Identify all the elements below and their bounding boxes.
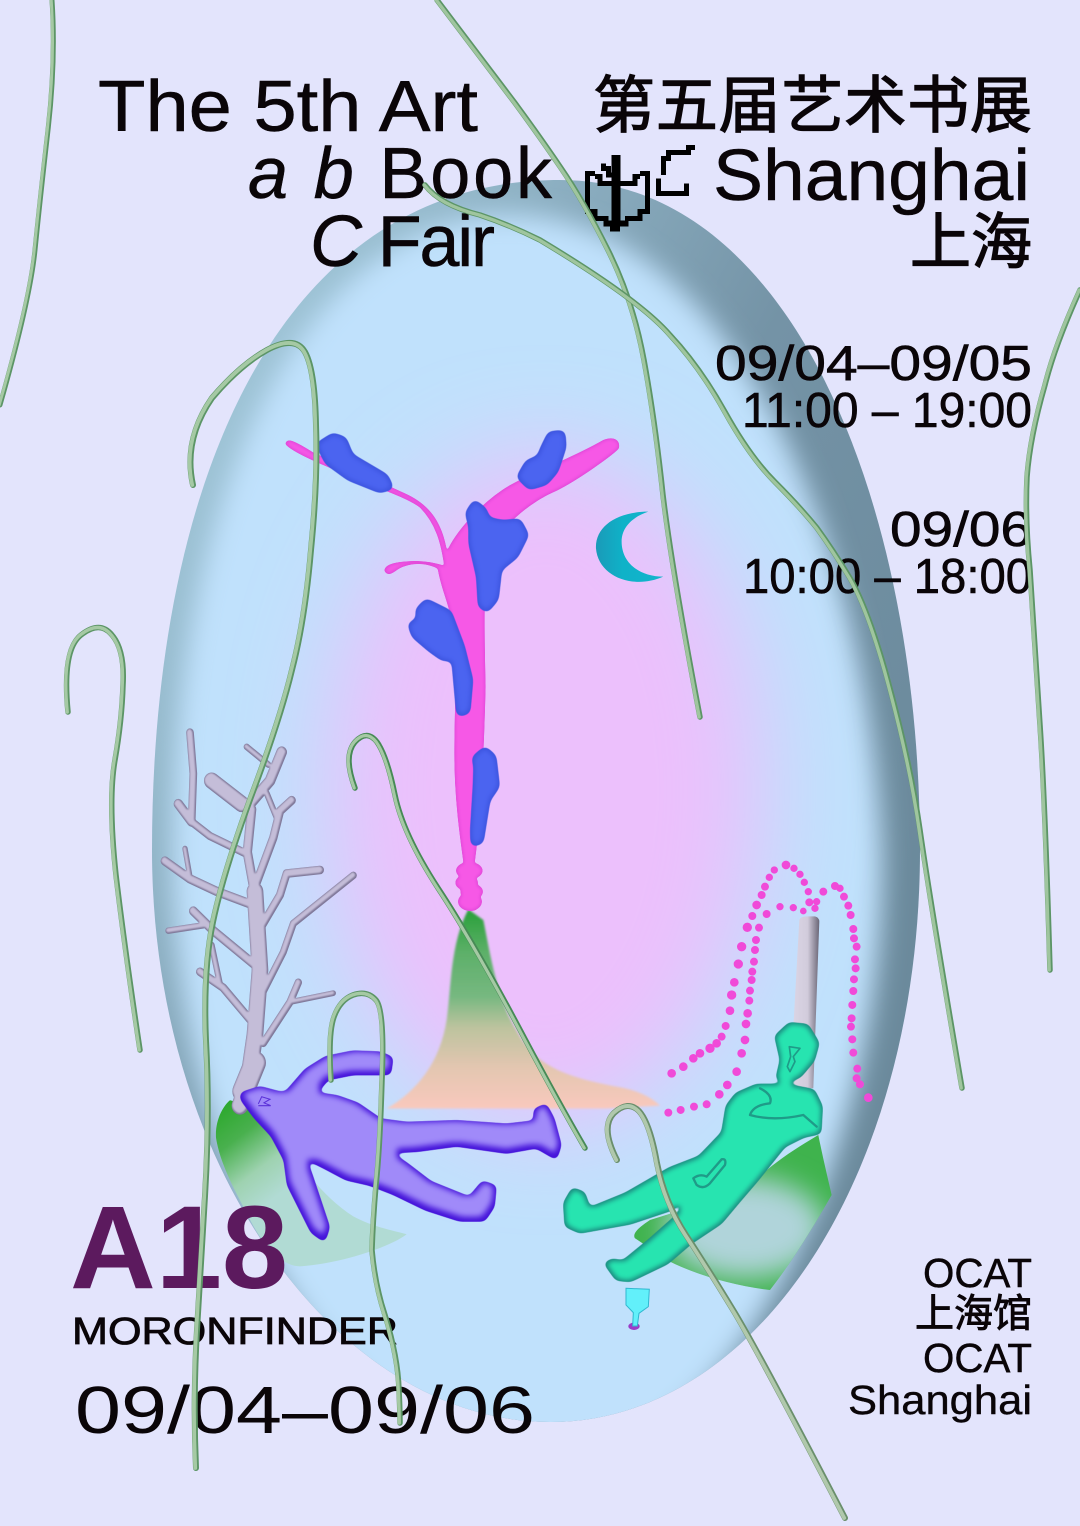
green cone base (387, 909, 660, 1109)
bead string three (820, 883, 872, 1101)
schedule dates second block (743, 503, 1032, 604)
egg shape panel (140, 170, 940, 1475)
pink glow (330, 455, 760, 1125)
schedule dates first block: 09/04–09/05 (715, 337, 1032, 391)
fair dates: 09/04–09/06 (75, 1373, 535, 1448)
title english: C Fair (310, 202, 495, 282)
vine far right (1026, 290, 1080, 970)
venue (848, 1250, 1032, 1423)
title chinese and city: Shanghai (713, 136, 1030, 216)
branches (190, 732, 247, 854)
left green crescent (216, 1100, 407, 1266)
head (777, 1025, 817, 1081)
venue: OCAT (923, 1250, 1032, 1296)
teal reclining figure (566, 1025, 820, 1279)
pixel shield (585, 172, 650, 218)
vine small hook left (66, 628, 140, 1050)
teal figure details (693, 1047, 817, 1187)
trunk (240, 891, 260, 1106)
body (566, 1087, 820, 1279)
arm fold (750, 1088, 817, 1127)
exhibitor name: MORONFINDER (72, 1311, 398, 1353)
wine glass (626, 1288, 649, 1330)
stem and branches (286, 439, 619, 910)
vine hook over figure (329, 993, 400, 1423)
pink branching plant (286, 439, 619, 910)
bead string one (668, 861, 818, 1077)
crescent moon (596, 512, 663, 582)
title english: a b Book (248, 134, 553, 214)
vine hook lower right (607, 1106, 845, 1518)
title english (98, 67, 553, 282)
knobs (457, 863, 482, 879)
icon: pixel logo (585, 147, 695, 228)
venue: 上海馆 (915, 1293, 1032, 1336)
pixel anchor stem (603, 155, 629, 225)
vine hook centre (348, 736, 585, 1148)
venue: Shanghai (848, 1377, 1032, 1423)
thick stub (212, 781, 242, 804)
bead string two (665, 899, 820, 1116)
schedule dates second block: 09/06 (890, 503, 1032, 557)
schedule dates second block: 10:00 – 18:00 (743, 550, 1032, 604)
booth number: A18 (70, 1182, 288, 1314)
crescent fill (634, 1135, 832, 1290)
egg shaded rim (140, 170, 940, 1440)
trunk bulge (243, 1063, 255, 1091)
schedule dates first block (715, 337, 1032, 438)
vine large hook left (190, 343, 316, 1468)
torso mark (693, 1159, 725, 1187)
coral-like tree (165, 732, 353, 1106)
title chinese and city: 上海 (910, 208, 1032, 276)
purple reclining figure (243, 1054, 558, 1238)
title chinese and city: 第五届艺术书展 (593, 72, 1032, 141)
face mark (787, 1047, 800, 1072)
glass cup and stem (626, 1288, 649, 1326)
pink bead strings (665, 861, 872, 1116)
venue: OCAT (923, 1335, 1032, 1381)
pale pillar (790, 916, 819, 1088)
pixel bracket (658, 147, 695, 193)
egg inner light blue (172, 215, 882, 1475)
glass base (628, 1323, 640, 1330)
vine top centre (436, 0, 700, 717)
title chinese and city (593, 72, 1032, 276)
title english: The 5th Art (98, 67, 478, 147)
schedule dates first block: 11:00 – 19:00 (742, 384, 1032, 438)
pixel inner wings (595, 163, 640, 183)
vine top left (0, 0, 53, 405)
blue blobs on plant (320, 434, 563, 843)
right green crescent (634, 1135, 832, 1290)
purple figure face mark (258, 1097, 271, 1106)
crescent pale centre (665, 1178, 825, 1278)
vine long right (424, 185, 962, 1088)
